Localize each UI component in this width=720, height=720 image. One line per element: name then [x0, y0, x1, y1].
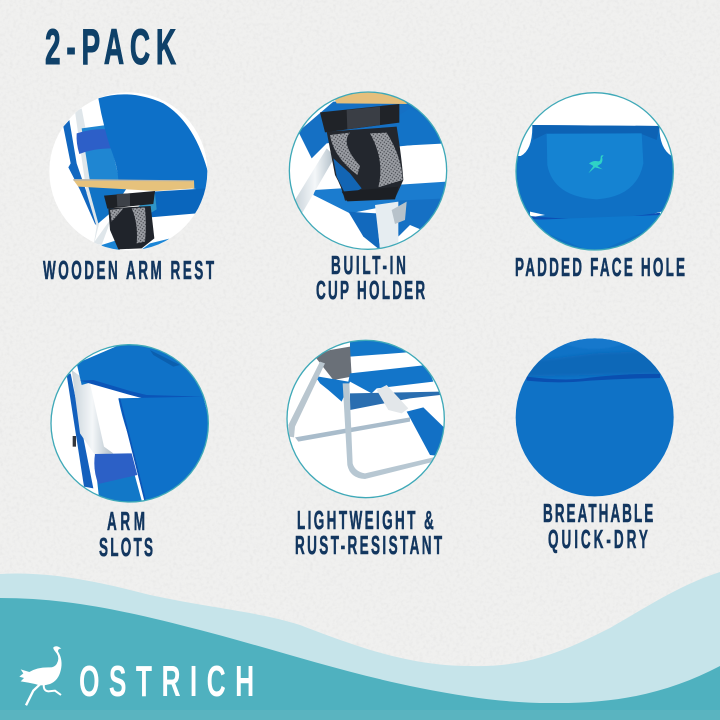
- light wave: [0, 572, 720, 720]
- label: cup holder: CUP HOLDER: [316, 276, 425, 305]
- photo: blue fabric: [513, 335, 674, 496]
- label: padded face hole: PADDED FACE HOLE: [515, 253, 685, 282]
- icon: ostrich: [19, 646, 62, 705]
- logo: ostrich: [19, 646, 254, 706]
- photo: arm slots: [51, 343, 212, 507]
- footer waves: [0, 572, 720, 720]
- label: built-in: BUILT-IN: [331, 251, 406, 280]
- panel: built-in cup holder: [289, 92, 447, 305]
- panel: padded face hole: [513, 93, 685, 282]
- photo: wooden arm rest: [49, 92, 210, 251]
- label: lightweight &: LIGHTWEIGHT &: [297, 506, 434, 535]
- panel: breathable quick-dry: [513, 335, 674, 554]
- title: 2-PACK: [45, 18, 176, 75]
- label: wooden arm rest: WOODEN ARM REST: [43, 256, 214, 285]
- photo: padded face hole: [513, 93, 677, 253]
- photo: aluminium frame: [287, 338, 447, 498]
- label: slots: SLOTS: [99, 533, 153, 562]
- dark wave: [0, 598, 720, 720]
- panel: arm slots: [51, 343, 212, 562]
- label: rust-resistant: RUST-RESISTANT: [295, 531, 442, 560]
- label: breathable: BREATHABLE: [543, 499, 653, 528]
- panel: wooden arm rest: [43, 92, 214, 285]
- icon: teal ostrich: [588, 155, 604, 173]
- label: quick-dry: QUICK-DRY: [548, 525, 648, 554]
- photo: cup holder: [289, 92, 447, 250]
- panel: lightweight and rust-resistant: [287, 338, 447, 560]
- wordmark: OSTRICH: [79, 656, 254, 706]
- label: arm: ARM: [107, 507, 145, 536]
